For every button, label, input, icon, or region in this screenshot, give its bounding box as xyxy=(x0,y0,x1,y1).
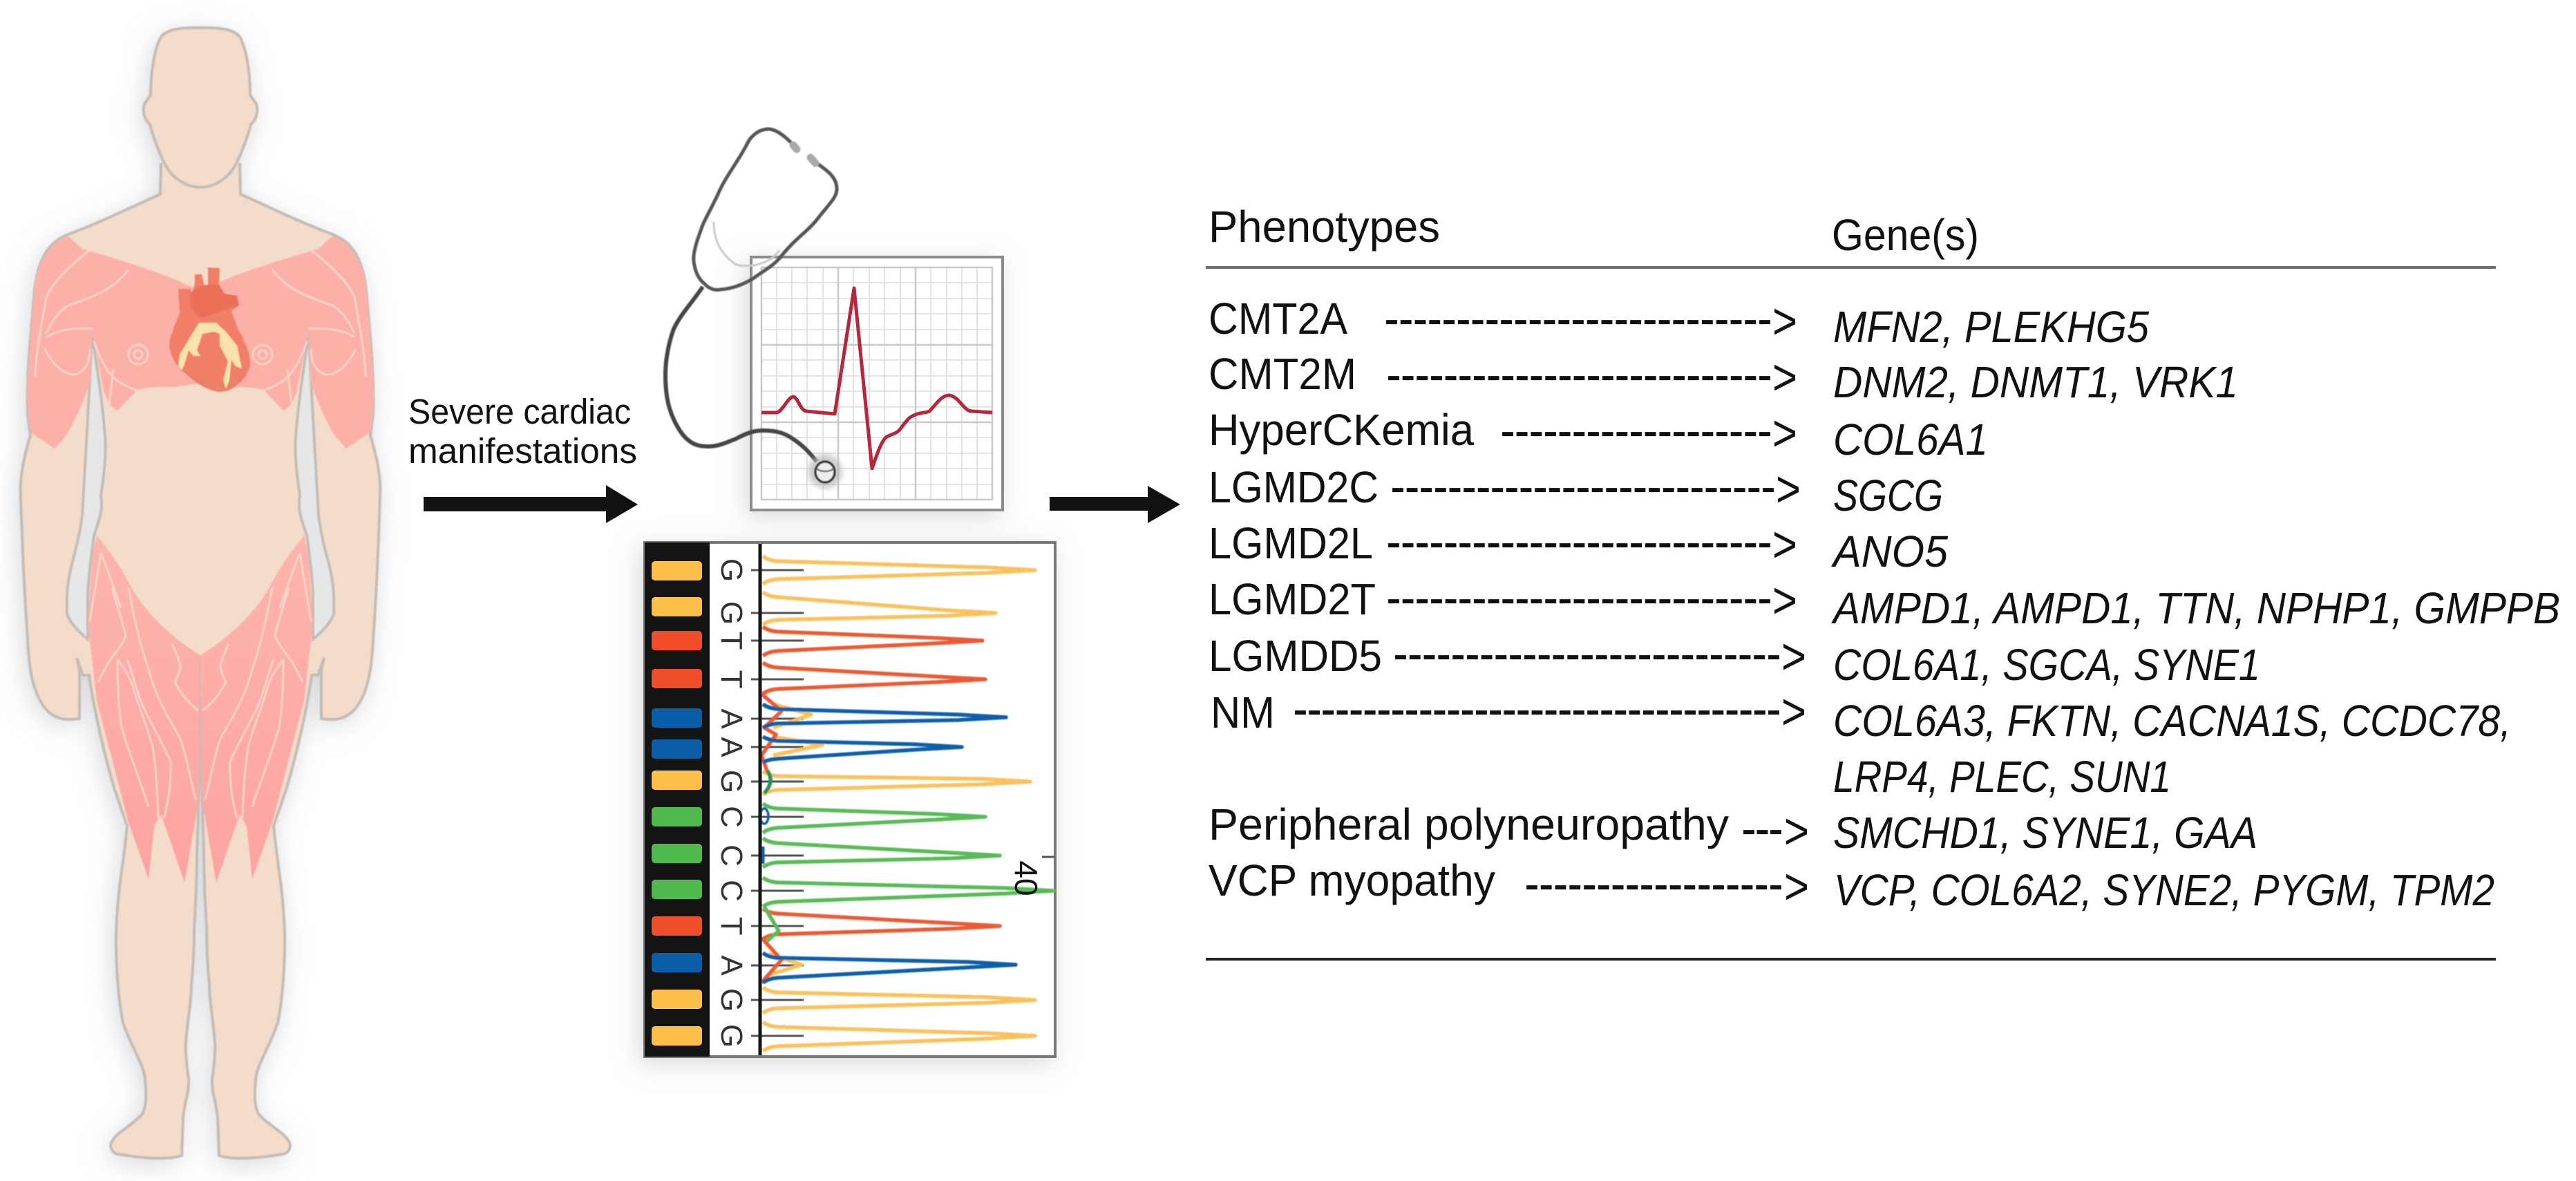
table: phenotypes and genes xyxy=(1206,202,2560,959)
row: CMT2M: DNM2, DNMT1, VRK1 xyxy=(1833,357,2238,407)
column heading: phenotypes: Phenotypes xyxy=(1209,202,1440,252)
row: VCP myopathy: VCP, COL6A2, SYNE2, PYGM, TPM2 xyxy=(1834,865,2494,915)
label: severe cardiac manifestations: manifestations xyxy=(408,431,637,471)
row: LGMD2L: LGMD2L xyxy=(1209,518,1373,568)
row: VCP myopathy xyxy=(1209,856,2494,915)
base letters: A xyxy=(714,955,748,976)
row: LGMD2L: --------------------------- xyxy=(1387,519,1772,565)
base letters: T xyxy=(714,632,748,650)
row: CMT2A: MFN2, PLEKHG5 xyxy=(1833,302,2149,352)
base letters: T xyxy=(714,917,748,935)
row: HyperCKemia: HyperCKemia xyxy=(1209,405,1474,455)
base letters: A xyxy=(714,737,748,757)
row: VCP myopathy: > xyxy=(1784,858,1809,915)
base call colour strip xyxy=(645,542,710,1057)
label: severe cardiac manifestations: Severe cardiac xyxy=(408,392,631,431)
icon: heart xyxy=(169,267,250,392)
panel: sequencing chromatogram xyxy=(645,542,1055,1057)
row: NM: NM xyxy=(1211,688,1275,737)
panel: ECG sheet xyxy=(751,257,1003,510)
column heading: genes: Gene(s) xyxy=(1832,210,1979,260)
arrow: to gene table xyxy=(1050,486,1180,523)
row: LGMD2T: LGMD2T xyxy=(1209,574,1376,624)
row: LGMDD5: COL6A1, SGCA, SYNE1 xyxy=(1833,640,2260,690)
row: LGMDD5 xyxy=(1209,627,2260,690)
row: HyperCKemia xyxy=(1209,404,1988,464)
row: LGMD2L xyxy=(1209,516,1948,576)
row: CMT2M xyxy=(1209,348,2238,407)
row: CMT2M: CMT2M xyxy=(1209,349,1356,399)
row: LGMD2T xyxy=(1209,571,2560,633)
base letters xyxy=(714,558,748,1048)
row: CMT2M: > xyxy=(1772,348,1797,406)
row: NM: LRP4, PLEC, SUN1 xyxy=(1833,752,2171,802)
row: peripheral polyneuropathy: Peripheral polyneuropathy xyxy=(1209,800,1729,849)
row: CMT2A: --------------------------- xyxy=(1385,296,1772,342)
row: NM: COL6A3, FKTN, CACNA1S, CCDC78, xyxy=(1833,696,2511,746)
row: LGMD2C xyxy=(1209,460,1943,520)
row: CMT2A xyxy=(1209,292,2149,352)
human body figure xyxy=(21,28,380,1158)
row: VCP myopathy: ------------------ xyxy=(1525,861,1783,907)
row: LGMD2T: --------------------------- xyxy=(1387,575,1772,621)
base letters: G xyxy=(714,988,748,1012)
base letters: T xyxy=(714,670,748,688)
row: CMT2A: > xyxy=(1772,292,1797,350)
base letters: A xyxy=(714,708,748,729)
base letters: G xyxy=(714,601,748,625)
row: LGMD2L: > xyxy=(1772,516,1797,573)
row: NM: ----------------------------------- xyxy=(1294,686,1781,733)
row: LGMDD5: LGMDD5 xyxy=(1209,631,1382,681)
ECG grid xyxy=(761,267,992,500)
row: HyperCKemia: COL6A1 xyxy=(1833,415,1988,464)
row: HyperCKemia: > xyxy=(1772,404,1797,462)
row: LGMDD5: > xyxy=(1781,627,1806,685)
row: LGMDD5: --------------------------- xyxy=(1394,631,1781,677)
row: NM xyxy=(1211,683,2511,802)
base letters: C xyxy=(714,806,748,828)
row: peripheral polyneuropathy: SMCHD1, SYNE1, GAA xyxy=(1833,808,2257,858)
baseline axis xyxy=(759,544,761,1055)
ECG trace xyxy=(761,288,992,469)
tick marks xyxy=(751,570,1055,1036)
arrow: to diagnostics xyxy=(424,485,638,523)
row: LGMD2L: ANO5 xyxy=(1830,527,1948,576)
row: NM: > xyxy=(1781,683,1806,740)
base letters: G xyxy=(714,558,748,582)
row: peripheral polyneuropathy xyxy=(1209,800,2257,860)
base letters: G xyxy=(714,770,748,793)
icon: stethoscope xyxy=(665,129,842,489)
base letters: C xyxy=(714,880,748,902)
row: LGMD2C: LGMD2C xyxy=(1209,462,1379,512)
row: LGMD2T: > xyxy=(1772,571,1797,629)
row: LGMD2C: SGCG xyxy=(1833,471,1943,520)
base letters: G xyxy=(714,1024,748,1048)
row: CMT2M: --------------------------- xyxy=(1387,352,1772,398)
row: HyperCKemia: ------------------- xyxy=(1501,408,1772,454)
row: peripheral polyneuropathy: > xyxy=(1784,802,1809,860)
base letters: C xyxy=(714,844,748,867)
row: VCP myopathy: VCP myopathy xyxy=(1209,856,1495,905)
sequence traces xyxy=(760,556,1054,1051)
row: CMT2A: CMT2A xyxy=(1209,294,1347,343)
row: peripheral polyneuropathy: --- xyxy=(1742,806,1783,852)
label: severe cardiac manifestations xyxy=(408,392,637,471)
row: LGMD2C: --------------------------- xyxy=(1391,464,1775,510)
position marker 40: 40 xyxy=(1008,860,1044,896)
row: LGMD2C: > xyxy=(1776,460,1801,518)
